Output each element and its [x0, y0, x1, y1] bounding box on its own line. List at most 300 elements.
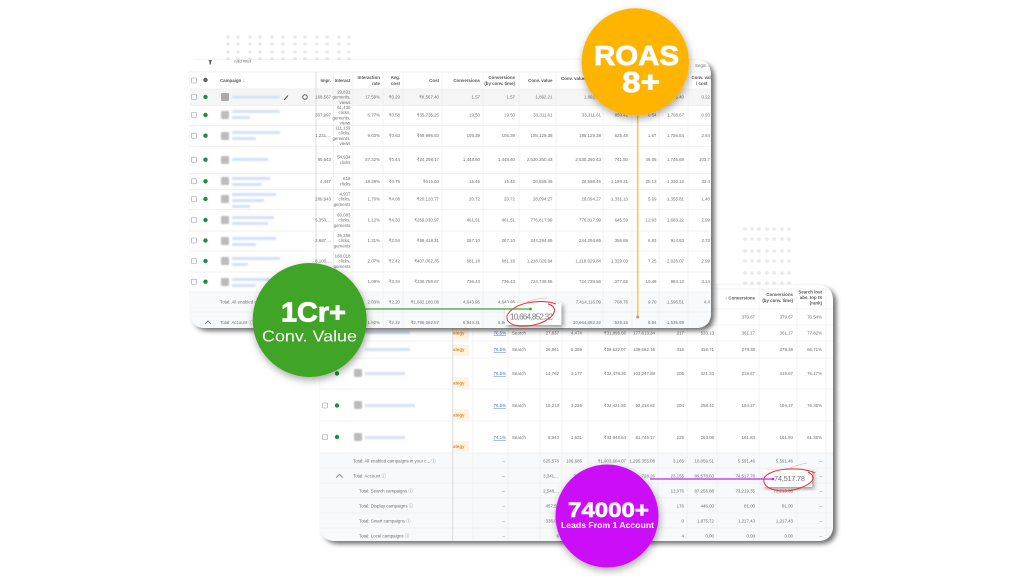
totals rows: Total: All enabled c... [220, 300, 260, 304]
totals rows: 1,217.43 [776, 518, 794, 524]
campaign rows: 1,448.60 [463, 157, 481, 162]
campaign rows: 9.03% [368, 133, 380, 138]
campaign rows: Search [512, 435, 526, 440]
campaign rows: 185,129.38 [579, 133, 602, 138]
campaign rows: 33.4 [701, 179, 711, 184]
campaign rows: 681.18 [467, 258, 481, 264]
campaign rows: gements, [332, 136, 350, 141]
totals rows: 34... [573, 474, 582, 478]
campaign rows: 645.59 [615, 218, 629, 222]
campaign rows: 185,129.38 [531, 133, 553, 138]
table header: (by conv. time) [762, 298, 794, 303]
campaign rows: 35,258 [337, 233, 351, 238]
campaign rows: ₹0.29 [389, 94, 401, 100]
campaign rows: 77.82% [807, 330, 822, 336]
totals rows: Total: All enabled campaigns in your c... ⓘ [353, 458, 436, 464]
campaign rows: 263.08 [701, 435, 715, 440]
badge: 1Cr+ Conv. Value: 1Cr+ [281, 297, 346, 328]
campaign rows: 18.39% [365, 179, 380, 184]
campaign rows: 27,837 [546, 330, 560, 336]
campaign rows: ₹4.08 [389, 196, 401, 202]
totals rows: ₹1,903,604.07 [598, 458, 627, 464]
campaign rows: 1,330.13 [667, 179, 685, 184]
campaign rows: 33,311.61 [582, 112, 602, 118]
campaign rows: ₹3.34 [389, 279, 401, 284]
campaign rows: 1,683.22 [667, 218, 685, 222]
campaign rows: 17.59% [365, 94, 380, 100]
campaign rows: 379.67 [780, 314, 794, 320]
table header [725, 290, 823, 306]
campaign rows: 2.73 [701, 238, 711, 243]
campaign rows: 321.33 [701, 371, 715, 376]
totals rows: 4,643.95 [463, 300, 481, 304]
campaign rows: ategy [453, 444, 465, 449]
totals rows: ₹2,795,562.57 [411, 320, 440, 325]
campaign rows: 76.35% [807, 403, 822, 408]
campaign rows: ₹0.75 [389, 179, 401, 184]
campaign rows: 28,094.27 [533, 196, 553, 202]
campaign rows: 6.93 [648, 238, 657, 243]
totals rows: 1,875.72 [697, 518, 715, 524]
totals rows: 89,578.60 [694, 474, 715, 478]
totals rows: – [820, 488, 823, 494]
campaign rows: 5.69 [648, 196, 657, 202]
totals rows: Total: Account ⓘ [353, 472, 387, 480]
campaign rows: 57.32% [365, 157, 380, 162]
campaign rows: ategy [453, 380, 465, 386]
totals rows: 6,943.31 [498, 320, 516, 325]
campaign rows: 267.10 [502, 238, 516, 243]
campaign rows: 1,218,029.84 [575, 258, 602, 264]
campaign rows: 1,448.60 [498, 157, 516, 162]
campaign rows: 20.72 [469, 196, 481, 202]
campaign rows: ₹31,896.66 [604, 330, 627, 336]
badge: 1Cr+ Conv. Value: Conv. Value [262, 328, 357, 346]
campaign rows: 105.39 [467, 133, 481, 138]
campaign rows: 8,100,... [315, 258, 331, 264]
campaign rows: 168,018 [335, 254, 351, 258]
totals rows: 87,256.88 [694, 488, 715, 494]
campaign rows: 76.5% [494, 403, 506, 408]
campaign rows: 1,218,029.84 [527, 258, 553, 264]
campaign rows: 418.71 [701, 347, 715, 352]
campaign rows: 8,943 [548, 435, 560, 440]
campaign rows: clicks, [339, 218, 350, 222]
campaign rows: 76.5% [494, 347, 506, 352]
campaign rows: 914.63 [671, 238, 685, 243]
campaign rows: 3,226 [571, 403, 583, 408]
campaign rows: 92,218.82 [635, 403, 656, 408]
table header: Interaction [358, 75, 380, 80]
campaign rows: 76.17% [807, 371, 822, 376]
campaign rows: 29,831 [337, 90, 351, 94]
totals rows: 176 [677, 504, 685, 508]
totals rows: Total: Smart campaigns ⓘ [359, 518, 411, 524]
table header: ↓ Conversions [725, 296, 756, 300]
campaign rows: 1,892.21 [584, 94, 602, 100]
campaign rows: 4,447 [320, 179, 332, 184]
campaign rows: 2.07% [368, 258, 380, 264]
totals rows: 73,219.35 [735, 488, 756, 494]
campaign rows: 1,329.03 [611, 258, 629, 264]
campaign rows: 533.13 [701, 330, 715, 336]
campaign rows: ₹24,298.17 [417, 157, 440, 162]
totals rows: 528.15 [615, 320, 629, 325]
campaign rows: 736.43 [467, 279, 481, 284]
badge: ROAS 8+ [582, 8, 689, 116]
campaign rows: 461.51 [502, 218, 516, 222]
campaign rows: 724,739.56 [531, 279, 553, 284]
campaign rows: 258.42 [701, 403, 715, 408]
campaign rows: clicks, [339, 110, 350, 115]
table header: Conv. value [561, 76, 586, 81]
campaign rows: 289,943 [315, 196, 332, 202]
totals rows: Total: Search campaigns ⓘ [359, 488, 413, 494]
totals rows: – [503, 488, 506, 494]
totals rows: 2.03% [368, 300, 380, 304]
campaign rows: gements, [332, 94, 350, 100]
campaign rows: 4,937 [340, 192, 351, 196]
callout: 74,517.78 leads: 74,517.78 [774, 474, 805, 483]
campaign rows: ₹20,120.77 [417, 196, 440, 202]
table header: Conv. value [528, 78, 553, 83]
campaign rows: ₹35,735.25 [417, 112, 440, 118]
campaign rows: 60,083 [337, 212, 351, 218]
dot grid: top left [226, 35, 351, 61]
campaign rows: 7.25 [648, 258, 657, 264]
campaign rows: 4,474 [571, 330, 583, 336]
totals rows: 3,341,... [543, 474, 559, 478]
totals rows: 5,591.46 [738, 458, 756, 464]
totals rows [336, 458, 823, 540]
totals rows: 1,596.51 [667, 300, 685, 304]
totals rows: 1.92% [368, 320, 380, 325]
table header [192, 75, 716, 86]
campaign rows: 776,817.99 [531, 218, 553, 222]
campaign rows: 736.43 [502, 279, 516, 284]
campaign rows: 776,817.99 [579, 218, 602, 222]
table header: Avg. [391, 75, 400, 80]
table header: (rank) [810, 300, 823, 306]
campaign rows: 315 [677, 347, 685, 352]
campaign rows: 267.10 [467, 238, 481, 243]
campaign rows: 161.83 [742, 435, 756, 440]
campaign rows: 70.54% [807, 314, 822, 320]
campaign rows: gements, [332, 115, 350, 120]
filter bar: Add filter [234, 58, 252, 64]
campaign rows: 204 [677, 403, 685, 408]
totals rows: 106,686 [566, 458, 583, 464]
campaign rows: ₹69,996.63 [417, 133, 440, 138]
campaign rows: 681.18 [502, 258, 516, 264]
campaign rows: 76.5% [494, 371, 506, 376]
campaign rows: 818 [343, 176, 351, 181]
totals rows: 708.76 [615, 300, 629, 304]
campaign rows: ₹32,478.26 [604, 371, 627, 376]
campaign rows: 95,843 [318, 157, 332, 162]
campaign rows: 28,094.27 [581, 196, 602, 202]
campaign rows: ₹2.54 [389, 238, 401, 243]
campaign rows: 12.93 [646, 218, 657, 222]
totals rows: 336,09 [546, 518, 560, 524]
campaign rows: 6.77% [368, 112, 380, 118]
campaign rows: 19.50 [504, 112, 516, 118]
totals rows: 0.00 [784, 534, 794, 538]
campaign rows: 219.67 [742, 371, 756, 376]
campaign rows: 1,631 [571, 435, 583, 440]
table header: Campaign ↓ [220, 78, 245, 83]
campaign rows: ₹0.58 [389, 112, 401, 118]
campaign rows: 54,934 [337, 154, 351, 159]
campaign rows: 0.93 [701, 112, 711, 118]
table header: Conv. value [692, 75, 716, 80]
campaign rows: 1.12% [368, 218, 380, 222]
campaign rows: 1.40 [701, 196, 711, 202]
panel: leads campaign table [320, 285, 834, 541]
totals rows: ₹2.20 [389, 300, 401, 304]
arrow: green line to conversion value [360, 308, 532, 310]
table header: Interact [335, 78, 351, 83]
table header: abs. top IS [800, 295, 822, 300]
campaign rows: 219.67 [780, 371, 794, 376]
campaign rows: 741.50 [615, 157, 629, 162]
table header: Impr. [320, 78, 331, 83]
campaign rows: 20,558.45 [581, 179, 602, 184]
table header: cost [391, 81, 401, 86]
totals rows: 7,414,116.09 [576, 300, 602, 304]
totals rows: 1,535.99 [667, 320, 685, 325]
campaign rows: views [340, 141, 351, 146]
table header: Cost [429, 78, 440, 83]
campaign rows: gements [334, 202, 351, 207]
campaign rows: 194.17 [780, 403, 794, 408]
table header: rate [372, 81, 381, 86]
arrow: magenta line to leads callout [650, 478, 774, 480]
totals rows: 3,165 [673, 458, 685, 464]
campaign rows: 2,026.07 [667, 258, 685, 264]
totals rows: 23,155 [671, 474, 685, 478]
campaign rows: gements [334, 264, 351, 269]
campaign rows: clicks, [339, 196, 350, 202]
campaign rows: 724,739.56 [579, 279, 602, 284]
callout: 10,664,852.32 conversion value [505, 298, 562, 326]
table header: / cost [696, 81, 708, 86]
campaign rows: 2.99 [701, 218, 711, 222]
totals rows: 625,578 [543, 458, 560, 464]
totals rows: 10,664,852.32 [573, 320, 602, 325]
campaign rows: 15,213 [546, 403, 560, 408]
campaign rows: views [340, 100, 351, 105]
filter bar: Segm... [695, 63, 710, 68]
campaign rows: 33,311.61 [533, 112, 553, 118]
campaign rows: 5.40 [675, 94, 685, 100]
totals rows [205, 300, 711, 326]
campaign rows: ₹89,418.31 [417, 238, 440, 243]
campaign rows: 15.46 [469, 179, 481, 184]
campaign rows: gements [334, 244, 351, 248]
table header: Conversions [488, 75, 516, 80]
totals rows: 9.70 [648, 300, 657, 304]
totals rows: – [503, 534, 506, 538]
campaign rows: 20.72 [504, 196, 516, 202]
campaign rows: 356.69 [615, 238, 629, 243]
campaign rows: 1,199.21 [611, 179, 629, 184]
campaign rows: 461.51 [467, 218, 481, 222]
totals rows: ₹1,682,180.08 [411, 300, 440, 304]
campaign rows: 1,756.54 [667, 133, 685, 138]
totals rows: 4,643.95 [498, 300, 516, 304]
totals rows: – [820, 458, 823, 464]
campaign rows: Search [512, 403, 526, 408]
totals rows: Total: Display campaigns ⓘ [359, 502, 414, 510]
campaign rows: clicks [340, 160, 351, 165]
campaign rows: ategy [453, 347, 465, 352]
table header: Search lost [798, 290, 823, 294]
totals rows: ...728.26 [638, 474, 656, 478]
campaign rows: 1,355.81 [667, 196, 685, 202]
totals rows: 5,591.46 [776, 458, 794, 464]
campaign rows: 66.71% [807, 347, 822, 352]
campaign rows: 278.38 [742, 347, 756, 352]
totals rows: 12,976 [671, 488, 685, 494]
campaign rows: 244,294.65 [531, 238, 553, 243]
totals rows: 0.00 [746, 534, 756, 538]
campaign rows: 225 [677, 435, 685, 440]
campaign rows: 46.06 [646, 157, 657, 162]
campaign rows: 103,247.88 [633, 371, 656, 376]
campaign rows: 177,613.34 [633, 330, 656, 336]
campaign rows: 1.08% [368, 279, 380, 284]
totals rows: 457,54 [546, 504, 560, 508]
badge: ROAS 8+: 8+ [622, 67, 660, 99]
campaign rows: 278.38 [780, 347, 794, 352]
totals rows: 4.4 [704, 300, 711, 304]
campaign rows: 168,567 [315, 94, 332, 100]
campaign rows: ₹0.44 [389, 157, 401, 162]
badge: ROAS 8+: ROAS [594, 40, 679, 71]
campaign rows: 0.54 [648, 112, 657, 118]
campaign rows: ₹4.33 [389, 218, 401, 222]
totals rows: 81.00 [744, 504, 756, 508]
campaign rows: clicks, [339, 258, 350, 264]
campaign rows: Search [512, 330, 526, 336]
campaign rows: ₹615.03 [423, 179, 440, 184]
totals rows: – [503, 504, 506, 508]
totals rows: 10,859.51 [694, 458, 715, 464]
campaign rows: 1.70% [368, 196, 380, 202]
campaign rows: 20,558.45 [533, 179, 553, 184]
campaign rows: 307,997 [315, 112, 332, 118]
campaign rows: ₹43,848.64 [604, 435, 627, 440]
campaign rows: 15.46 [504, 179, 516, 184]
campaign rows: clicks, [339, 131, 350, 136]
campaign rows: 244,294.65 [579, 238, 602, 243]
campaign rows: 5,369 [571, 347, 583, 352]
campaign rows: 1,746.69 [667, 157, 685, 162]
campaign rows: ₹0.63 [389, 133, 401, 138]
campaign rows: 2,687,... [315, 238, 331, 243]
campaign rows: ategy [453, 412, 465, 418]
campaign rows: ₹407,062.35 [414, 258, 440, 264]
campaign rows: ₹2.42 [389, 258, 401, 264]
campaign rows: 61.36% [807, 435, 822, 440]
campaign rows: ategy [453, 330, 465, 336]
totals rows: – [820, 534, 823, 538]
campaign rows: 111,159 [335, 126, 351, 131]
totals rows: ₹2.32 [389, 320, 401, 325]
totals rows: 0 [682, 518, 685, 524]
campaign rows: ₹259,030.97 [414, 218, 440, 222]
table header: Conversions [453, 78, 481, 83]
campaign rows: 81,745.17 [635, 435, 656, 440]
campaign rows: 19.50 [469, 112, 481, 118]
campaign rows: 1,708.67 [667, 112, 685, 118]
totals rows: 81.00 [782, 504, 794, 508]
totals rows: 2,548,... [543, 488, 559, 494]
campaign rows: clicks, [339, 238, 350, 243]
totals rows: – [820, 474, 823, 478]
totals rows: 1,217.43 [738, 518, 756, 524]
campaign rows: 1,231,... [315, 133, 331, 138]
totals rows: 1,295,355.08 [629, 458, 656, 464]
campaign rows: 139,582.16 [633, 347, 656, 352]
totals rows: Total: Local campaigns ⓘ [359, 532, 410, 540]
campaign rows: 2.99 [701, 258, 711, 264]
totals rows: 74,517.78 [735, 474, 756, 478]
badge: 74000+ Leads From 1 Account [556, 464, 658, 568]
campaign rows: ₹32,421.55 [604, 403, 627, 408]
totals rows: 73,219.35 [773, 488, 794, 494]
badge: 74000+ Leads From 1 Account: 74000+ [568, 499, 649, 522]
campaign rows: 103.7 [699, 157, 711, 162]
campaign rows: 3,177 [571, 371, 583, 376]
totals rows: 8.84 [648, 320, 657, 325]
campaign rows: 2.64 [701, 133, 711, 138]
campaign rows: 1,892.21 [535, 94, 553, 100]
totals rows: – [503, 474, 506, 478]
totals rows: – [503, 518, 506, 524]
campaign rows: 3.14 [701, 279, 711, 284]
campaign rows: 850.42 [615, 112, 629, 118]
totals rows: – [503, 458, 506, 464]
table header: Conversions [766, 292, 794, 297]
campaign rows: 361.17 [742, 330, 756, 336]
campaign rows: 74.1% [494, 435, 506, 440]
totals rows: 6 [557, 534, 560, 538]
totals rows: 446.00 [701, 504, 715, 508]
totals rows: – [820, 518, 823, 524]
campaign rows: gements [334, 223, 351, 228]
filter bar [208, 60, 710, 68]
campaign rows: 361.17 [780, 330, 794, 336]
campaign rows: 2,530,260.43 [575, 157, 602, 162]
totals rows: Total: Account ⓘ [220, 319, 254, 326]
campaign rows: 217 [677, 330, 685, 336]
campaign rows: views [340, 120, 351, 126]
campaign rows [322, 314, 822, 449]
campaign rows: 105.39 [502, 133, 516, 138]
campaign rows: 2,530,260.43 [527, 157, 553, 162]
campaign rows: 984.13 [671, 279, 685, 284]
totals rows: 4 [682, 534, 685, 538]
campaign rows: 26,841 [546, 347, 560, 352]
table header: (by conv. time) [484, 81, 516, 86]
campaign rows: 379.67 [742, 314, 756, 320]
campaign rows: 1.31% [368, 238, 380, 243]
arrow: orange line from ROAS badge [636, 110, 639, 318]
panel: conversion value campaign table [190, 58, 716, 329]
campaign rows: Search [512, 371, 526, 376]
